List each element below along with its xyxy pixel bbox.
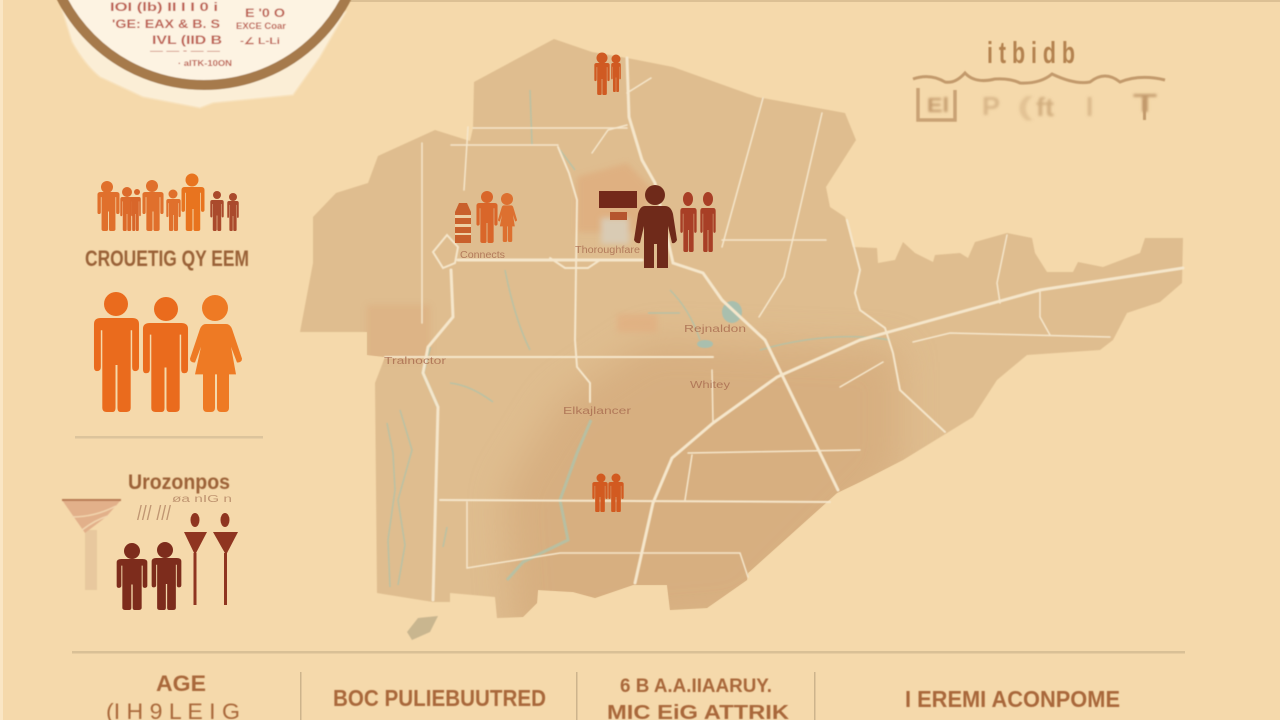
pin figure left [184,513,207,605]
legend: top right [913,35,1165,122]
legend marks [927,88,1157,122]
legend marks: ( [1017,91,1034,121]
left panel [62,174,263,610]
trio icon [94,292,242,412]
footer column: age [106,671,240,720]
badge text lines: IVL (IID B [152,33,222,47]
footer column: income: I EREMI ACONPOME [905,686,1120,712]
terrain patch [617,314,657,332]
map place labels [384,245,746,417]
lakes [697,301,742,348]
badge text lines: -∠ L-Li [240,36,280,46]
divider [75,436,263,438]
legend marks: ft [1036,92,1054,122]
top edge band [350,0,1280,2]
badge text lines: — — - — — [150,49,220,55]
map place labels: Connects [460,250,505,261]
population marker: west [455,191,517,243]
roads [385,58,1183,600]
legend marks: El [927,95,949,117]
rivers [387,90,890,587]
map place labels: Tralnoctor [384,356,447,367]
legend marks: T [1133,88,1157,118]
legend box [918,88,955,120]
footer rule [72,651,1185,654]
sub caption: øa nIG n [172,494,232,505]
population marker: south [592,474,624,512]
family group caption: CROUETIG QY EEM [85,246,249,271]
subheading: Urozonpos [128,471,230,494]
legend title: i t b i d b [987,35,1075,70]
funnel icon [62,500,121,590]
footer column: population: BOC PULIEBUUTRED [333,685,546,711]
map place labels: Rejnaldon [684,324,746,335]
squiggle text: /// /// [137,503,171,525]
map place labels: Thoroughfare [575,245,640,256]
map landmass [300,39,1183,618]
map place labels: Whitey [690,380,730,391]
badge text lines: · aITK-10ON [178,59,232,68]
footer column: income group: 6 B A.A.IIAARUY. [620,676,772,697]
family group icons [97,174,239,231]
footer [72,651,1185,720]
footer column: age: AGE [156,671,206,696]
map [300,39,1183,640]
badge text lines: IOI (lb) II I I 0 i [110,0,218,14]
two dark persons [117,542,181,610]
badge: circular seal at top left [44,0,364,108]
footer dividers [300,672,816,720]
darker terrain [505,340,900,640]
badge text lines [110,0,287,68]
legend marks: P [982,91,1000,121]
left edge strip [0,0,3,720]
map place labels: Elkajlancer [563,406,632,417]
island [407,616,438,640]
population marker: north [594,52,621,95]
legend banner [913,73,1165,83]
badge text lines: E '0 O [245,6,285,20]
badge text lines: 'GE: EAX & B. S [112,17,220,31]
footer column: income group [607,676,790,720]
terrain highlight [577,163,653,232]
badge text lines: EXCE Coar [236,21,287,31]
terrain west [367,308,426,359]
pin figure right [213,513,238,605]
population marker: central figure with sign [599,185,677,268]
population marker: central pair [680,192,716,252]
legend marks: l [1086,92,1093,122]
